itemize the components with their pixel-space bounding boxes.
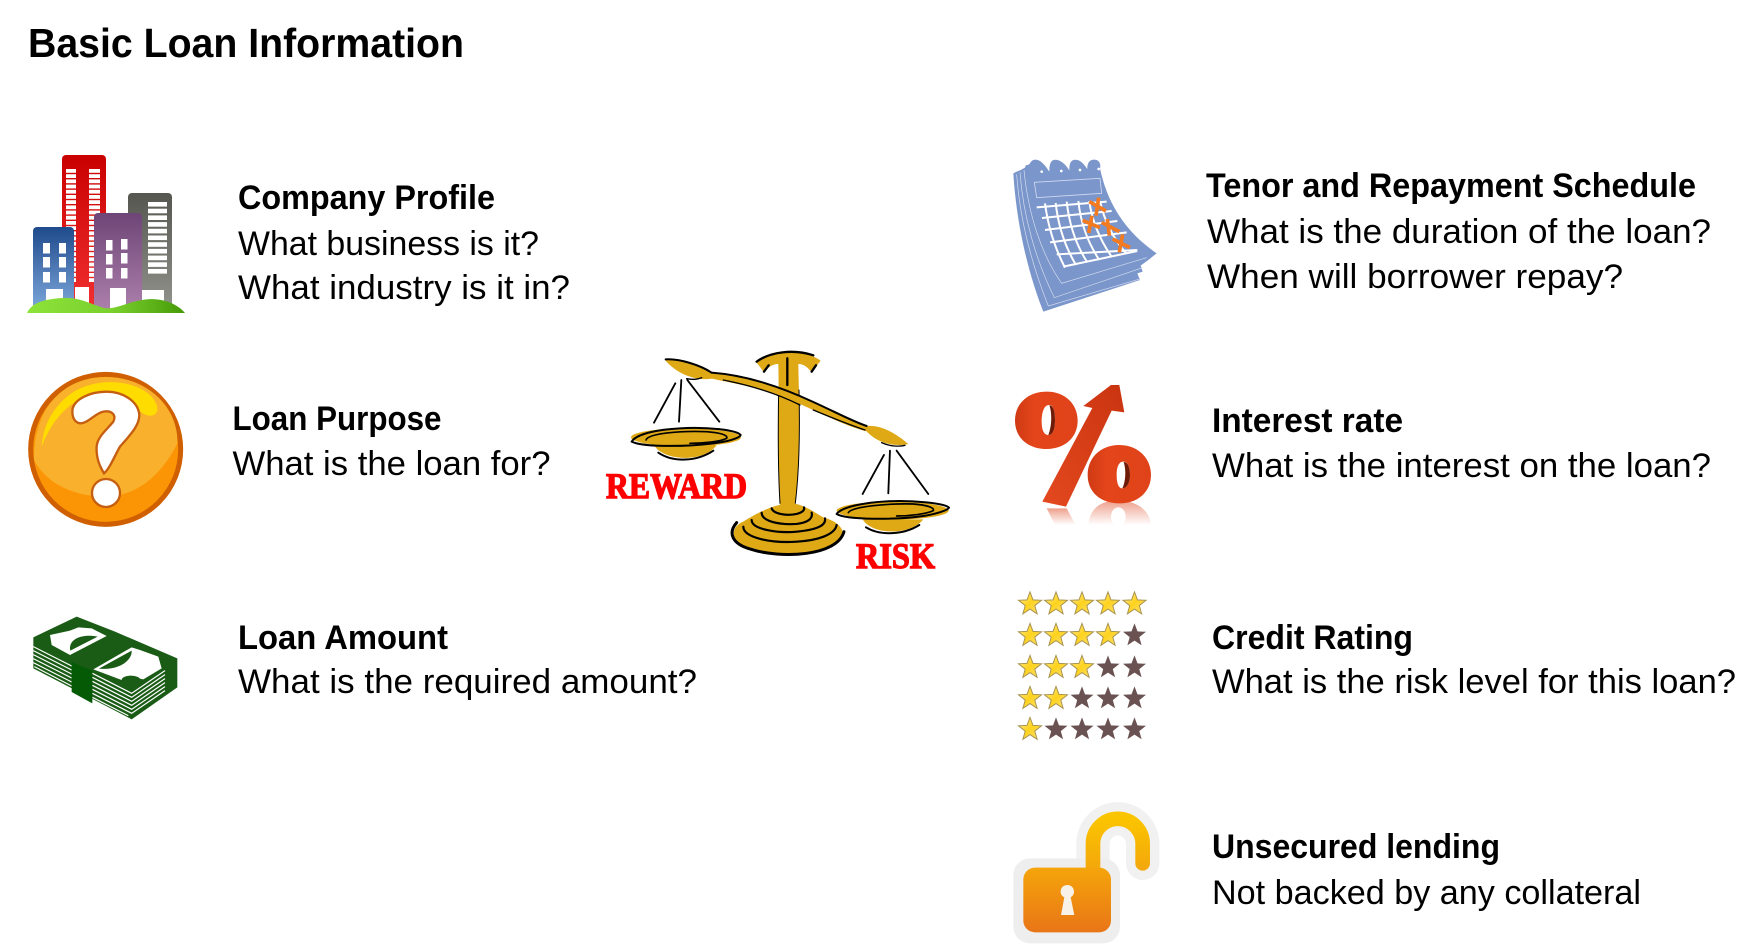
panel: loan purpose [31, 374, 551, 524]
text: business question: What business is it? [238, 225, 539, 263]
icon: percent with arrow [1015, 385, 1151, 526]
label: risk: RISK [856, 536, 935, 576]
title: Basic Loan Information [28, 20, 464, 66]
icon: balance scale [631, 352, 949, 555]
icon: open padlock [1013, 819, 1143, 943]
text: loan amount question: What is the required amount? [238, 663, 697, 701]
panel: loan amount [33, 617, 697, 719]
icon: star rating rows [1018, 592, 1146, 739]
heading: interest rate: Interest rate [1212, 402, 1403, 440]
right pan [837, 501, 949, 533]
icon: question mark [31, 374, 181, 524]
text: repayment question: When will borrower repay? [1207, 258, 1623, 296]
heading: tenor and repayment schedule: Tenor and Repayment Schedule [1206, 167, 1696, 205]
text: loan purpose question: What is the loan for? [232, 445, 550, 483]
icon: calendar [1013, 160, 1157, 312]
heading: credit rating: Credit Rating [1212, 619, 1413, 657]
icon: city buildings [27, 155, 185, 313]
panel: reward and risk scale [606, 352, 949, 576]
icon: stack of money [33, 617, 177, 719]
panel: unsecured lending [1013, 819, 1641, 943]
text: industry question: What industry is it in? [238, 269, 570, 307]
heading: loan amount: Loan Amount [238, 619, 448, 657]
heading: company profile: Company Profile [238, 179, 495, 217]
text: collateral note: Not backed by any collateral [1212, 874, 1641, 912]
heading: loan purpose: Loan Purpose [232, 400, 442, 438]
text: risk level question: What is the risk level for this loan? [1212, 663, 1736, 701]
panel: credit rating [1018, 592, 1736, 739]
panel: tenor and repayment schedule [1013, 160, 1711, 312]
heading: unsecured lending: Unsecured lending [1212, 828, 1500, 866]
label: reward: REWARD [606, 466, 747, 506]
panel: interest rate [1015, 385, 1711, 526]
text: duration question: What is the duration of the loan? [1207, 213, 1711, 251]
left pan [631, 428, 741, 460]
panel: company profile [27, 155, 570, 313]
text: interest question: What is the interest on the loan? [1212, 447, 1711, 485]
